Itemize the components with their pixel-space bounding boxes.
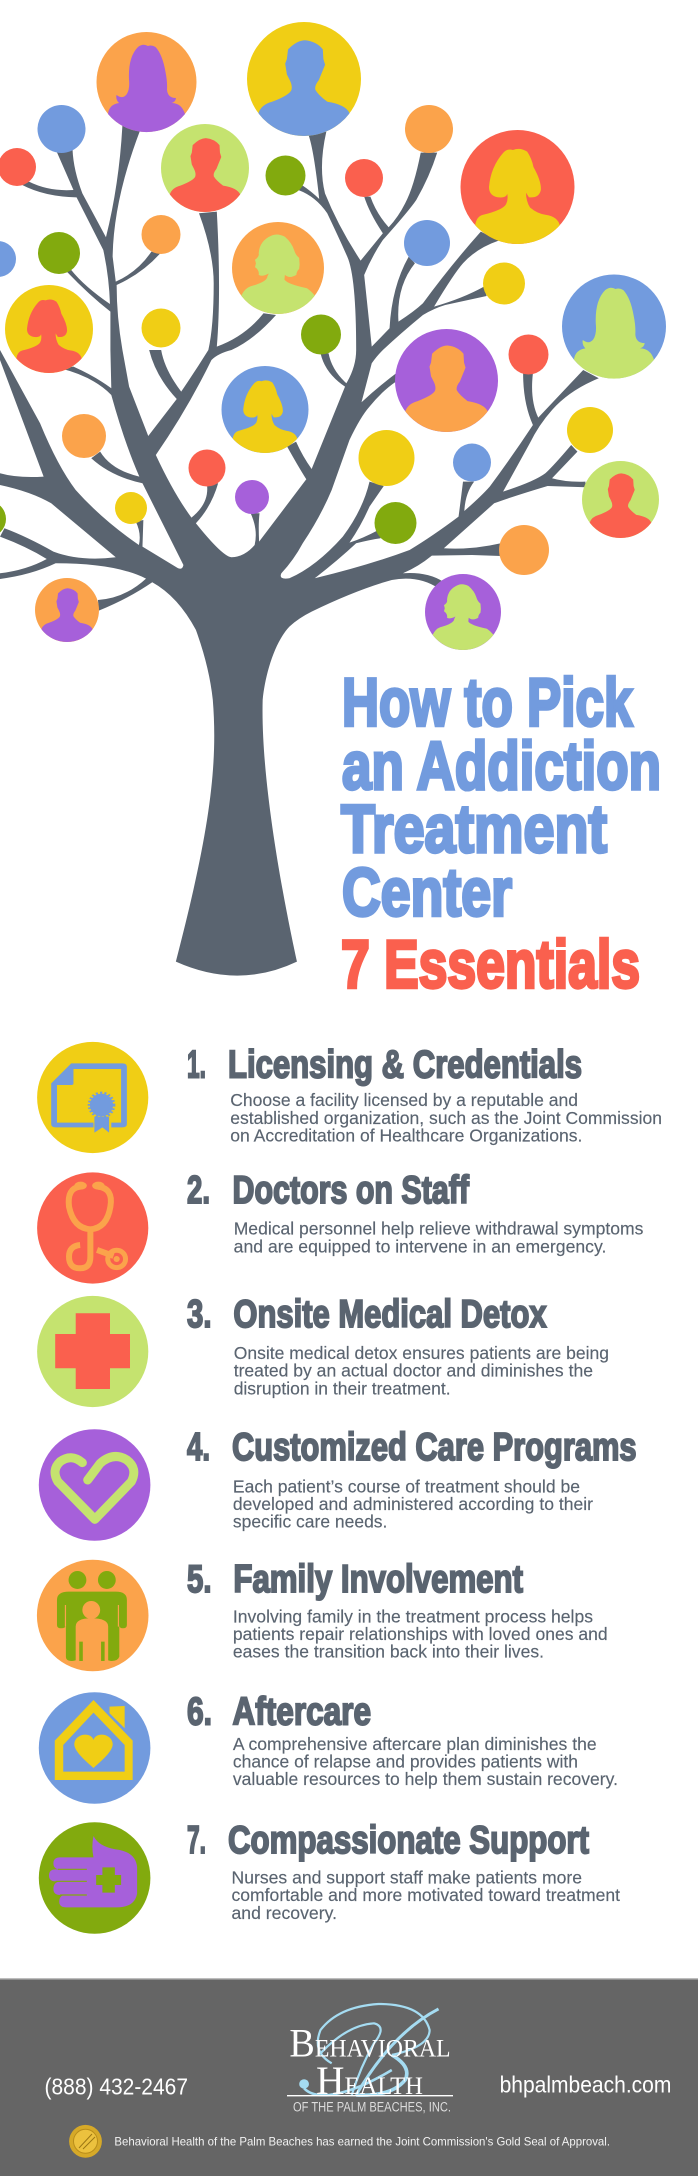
text: Choose a facility licensed by a reputable and: [230, 1090, 578, 1110]
logo: Behavioral Health: OF THE PALM BEACHES, INC.: [293, 2100, 451, 2114]
person: man blue on yellow: [247, 22, 361, 136]
text: and recovery.: [232, 1903, 337, 1923]
icon: certificate: [37, 1042, 148, 1153]
person: woman yellow on red: [460, 130, 574, 244]
gold seal statement: Behavioral Health of the Palm Beaches has earned the Joint Commission's Gold Seal of Approval.: [114, 2135, 610, 2149]
item 7: compassionate support: [39, 1819, 620, 1934]
person: man red on light green small: [582, 461, 659, 538]
text: specific care needs.: [233, 1512, 387, 1532]
icon: medical cross: [37, 1296, 148, 1407]
text: [233, 1606, 608, 1661]
text: patients repair relationships with loved ones and: [233, 1624, 608, 1644]
text: [232, 1867, 620, 1923]
text: and are equipped to intervene in an emergency.: [234, 1236, 606, 1256]
logo script B: [299, 2004, 439, 2095]
heading: 6.: [187, 1690, 212, 1734]
heading: Doctors on Staff: [232, 1169, 470, 1212]
title: Treatment: [341, 791, 607, 867]
title: Center: [342, 854, 512, 930]
heading: 1.: [187, 1044, 206, 1086]
icon: stethoscope: [37, 1172, 148, 1284]
item 1: licensing and credentials: [37, 1042, 662, 1153]
text: Each patient’s course of treatment should be: [233, 1476, 580, 1496]
heading: [187, 1690, 371, 1734]
text: Involving family in the treatment process helps: [233, 1606, 593, 1626]
heading: Family Involvement: [233, 1558, 523, 1601]
icon: caring hand: [39, 1822, 150, 1934]
heading: 5.: [187, 1558, 212, 1601]
person: woman yellow on blue: [222, 366, 308, 453]
text: Onsite medical detox ensures patients are being: [234, 1343, 609, 1363]
icon: gold seal: [69, 2125, 102, 2158]
item 4: customized care programs: [39, 1426, 637, 1541]
text: treated by an actual doctor and diminishes the: [234, 1361, 593, 1381]
text: comfortable and more motivated toward treatment: [232, 1885, 620, 1905]
text: Medical personnel help relieve withdrawal symptoms: [234, 1218, 644, 1238]
text: established organization, such as the Joint Commission: [230, 1108, 662, 1128]
phone number: (888) 432-2467: [44, 2073, 188, 2099]
text: developed and administered according to their: [233, 1494, 593, 1514]
text: disruption in their treatment.: [234, 1378, 451, 1398]
plain colored circles on branches: [0, 105, 613, 575]
item 3: onsite medical detox: [37, 1293, 609, 1407]
icon: house with heart: [39, 1692, 150, 1804]
item 5: family involvement: [37, 1558, 608, 1671]
person: man red on light green: [161, 124, 249, 212]
text: [234, 1343, 609, 1398]
logo: Behavioral Health: BEHAVIORAL: [289, 2021, 451, 2066]
text: eases the transition back into their lives.: [233, 1641, 544, 1661]
icon: heart outline: [39, 1429, 150, 1541]
item 6: aftercare: [39, 1690, 618, 1804]
tree trunk and branches: [0, 125, 599, 976]
person: woman light green on blue: [562, 274, 666, 379]
heading: 2.: [187, 1169, 210, 1212]
text: [230, 1090, 662, 1146]
heading: Compassionate Support: [228, 1819, 589, 1862]
icon: family: [37, 1560, 149, 1671]
person: woman light green on orange: [232, 222, 324, 314]
text: [233, 1734, 618, 1789]
person: woman light green on purple: [425, 574, 501, 650]
heading: Aftercare: [232, 1690, 371, 1734]
heading: 7.: [187, 1819, 206, 1862]
person: man orange on purple: [395, 329, 498, 432]
heading: 3.: [187, 1293, 212, 1336]
text: on Accreditation of Healthcare Organizations.: [230, 1126, 582, 1146]
item 2: doctors on staff: [37, 1169, 644, 1284]
logo: Behavioral Health: HEALTH: [316, 2058, 423, 2103]
person: woman red on yellow: [5, 285, 93, 373]
website: bhpalmbeach.com: [500, 2072, 671, 2098]
text: [233, 1476, 593, 1532]
text: valuable resources to help them sustain recovery.: [233, 1769, 618, 1789]
text: [234, 1218, 644, 1256]
heading: Onsite Medical Detox: [233, 1293, 547, 1336]
heading: Licensing & Credentials: [228, 1044, 582, 1086]
footer band: [0, 1978, 698, 2176]
text: A comprehensive aftercare plan diminishes the: [233, 1734, 597, 1754]
heading: 4.: [187, 1426, 210, 1469]
title: [341, 664, 661, 1002]
text: chance of relapse and provides patients with: [233, 1752, 578, 1772]
heading: [187, 1169, 470, 1212]
person: man purple on orange: [35, 578, 99, 642]
logo: Behavioral Health: [287, 2004, 453, 2114]
person: woman purple on orange: [96, 32, 196, 132]
illustration: tree of people: [0, 22, 666, 976]
text: Nurses and support staff make patients more: [232, 1867, 582, 1887]
